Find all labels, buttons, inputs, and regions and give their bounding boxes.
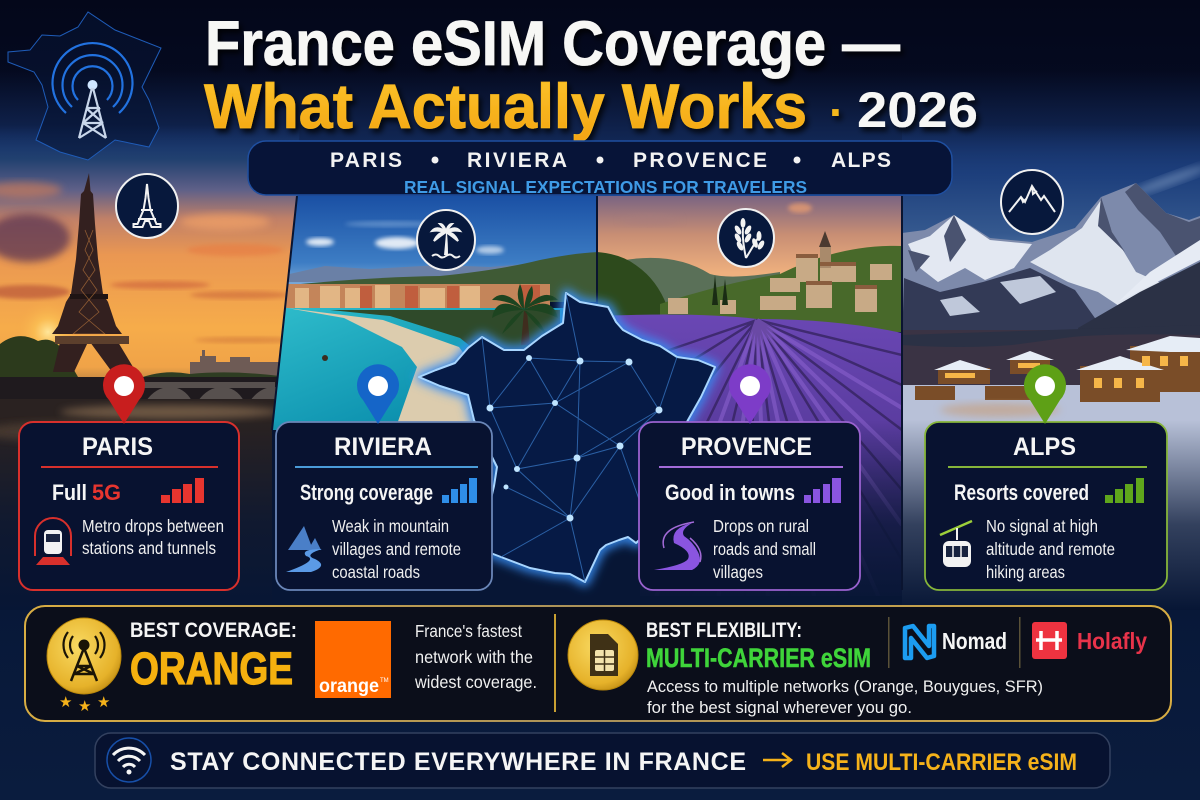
navy gap below the map <box>590 530 640 610</box>
icon: wifi <box>107 738 151 782</box>
panel: recommendations: BEST COVERAGE: <box>130 619 297 642</box>
arrow <box>763 753 791 767</box>
panel: Riviera: Weak in mountain <box>332 516 449 536</box>
icon: Provence pin <box>729 364 771 424</box>
icon: France outline with signal tower <box>8 12 161 160</box>
panel: Riviera: villages and remote <box>332 539 461 559</box>
photo: Paris sunset <box>0 131 300 529</box>
icon: palm tree <box>492 284 558 345</box>
icon: mountain badge <box>1001 170 1063 234</box>
sky glow behind title <box>0 70 1200 200</box>
panel: recommendations: BEST FLEXIBILITY: <box>646 619 802 642</box>
panel: recommendations <box>25 606 1171 721</box>
panel: Riviera: coastal roads <box>332 562 420 582</box>
panel: Alps: altitude and remote <box>986 539 1115 559</box>
icon: Alps pin <box>1024 364 1066 424</box>
panel: recommendations: ORANGE <box>130 643 293 694</box>
subtitle pill: RIVIERA <box>467 149 567 172</box>
icon: rating stars <box>59 694 110 715</box>
panel: bottom call to action: STAY CONNECTED EVERYWHERE IN FRANCE <box>170 748 746 776</box>
panel: recommendations: for the best signal wherever you go. <box>647 698 912 717</box>
icon: Eiffel Tower silhouette <box>52 173 136 372</box>
subtitle pill: PROVENCE <box>633 149 767 172</box>
title: France eSIM Coverage — <box>205 9 900 79</box>
panel: recommendations: network with the <box>415 647 533 667</box>
title <box>204 9 978 142</box>
divider lines between photos <box>272 196 902 590</box>
panel: recommendations: Access to multiple networks (Orange, Bouygues, SFR) <box>647 677 1043 696</box>
subtitle pill: REAL SIGNAL EXPECTATIONS FOR TRAVELERS <box>404 177 807 197</box>
title: · <box>829 86 844 138</box>
panel: Alps: ALPS <box>1013 433 1076 461</box>
panel: Paris: Full <box>52 480 87 505</box>
icon: rating stars: ★ <box>78 698 91 715</box>
icon: Orange logo: orange <box>319 676 379 697</box>
icon: gold SIM coin <box>568 620 638 690</box>
icon: Orange logo: TM <box>380 678 389 684</box>
photo: Riviera seafront <box>270 196 602 438</box>
subtitle pill <box>248 141 952 197</box>
panel: Riviera: RIVIERA <box>334 433 432 461</box>
panel: Alps: Resorts covered <box>954 480 1089 505</box>
icon: lavender badge <box>718 209 774 267</box>
panel: Alps: hiking areas <box>986 562 1065 582</box>
icon: Holafly logo <box>1032 622 1147 659</box>
icon: Holafly logo: Holafly <box>1077 628 1147 654</box>
icon: Nomad logo: Nomad <box>942 628 1007 654</box>
panel: Provence: Good in towns <box>665 480 795 505</box>
subtitle pill: PARIS <box>330 149 402 172</box>
icon: Eiffel badge <box>116 174 178 238</box>
panel: Alps <box>925 422 1167 590</box>
title: 2026 <box>857 82 978 138</box>
panel: Provence <box>639 422 860 590</box>
photo: Provence village and lavender <box>597 196 902 603</box>
panel: Provence: Drops on rural <box>713 516 809 536</box>
icon: gold tower coin <box>47 618 121 694</box>
panel: Alps: No signal at high <box>986 516 1098 536</box>
panel: recommendations: MULTI-CARRIER eSIM <box>646 643 871 673</box>
icon: rating stars: ★ <box>97 694 110 711</box>
France network map <box>419 293 715 582</box>
icon: Orange logo <box>315 621 391 698</box>
panel: recommendations: France's fastest <box>415 621 522 641</box>
panel: Riviera <box>276 422 492 590</box>
panel: Provence: PROVENCE <box>681 433 812 461</box>
panel: bottom call to action <box>95 733 1110 788</box>
panel: Provence: villages <box>713 562 763 582</box>
panel: Provence: roads and small <box>713 539 816 559</box>
icon: Nomad logo <box>905 626 1007 658</box>
panel: Riviera: Strong coverage <box>300 480 433 505</box>
icon: Paris pin <box>103 364 145 424</box>
panel: Paris: PARIS <box>82 433 153 461</box>
panel: Paris <box>19 422 239 590</box>
icon: rating stars: ★ <box>59 694 72 711</box>
subtitle pill: ALPS <box>831 149 891 172</box>
fade from photos into the navy lower area <box>0 420 1200 610</box>
title: What Actually Works <box>204 72 807 142</box>
icon: Riviera pin <box>357 364 399 424</box>
photo: Alps mountains and chalets <box>902 125 1200 610</box>
panel: recommendations: widest coverage. <box>414 672 537 692</box>
icon: palm badge <box>417 210 475 270</box>
panel: Paris: Metro drops between <box>82 516 224 536</box>
panel: bottom call to action: USE MULTI-CARRIER eSIM <box>806 749 1077 776</box>
panel: Paris: stations and tunnels <box>82 538 216 558</box>
panel: Paris: 5G <box>92 480 121 505</box>
